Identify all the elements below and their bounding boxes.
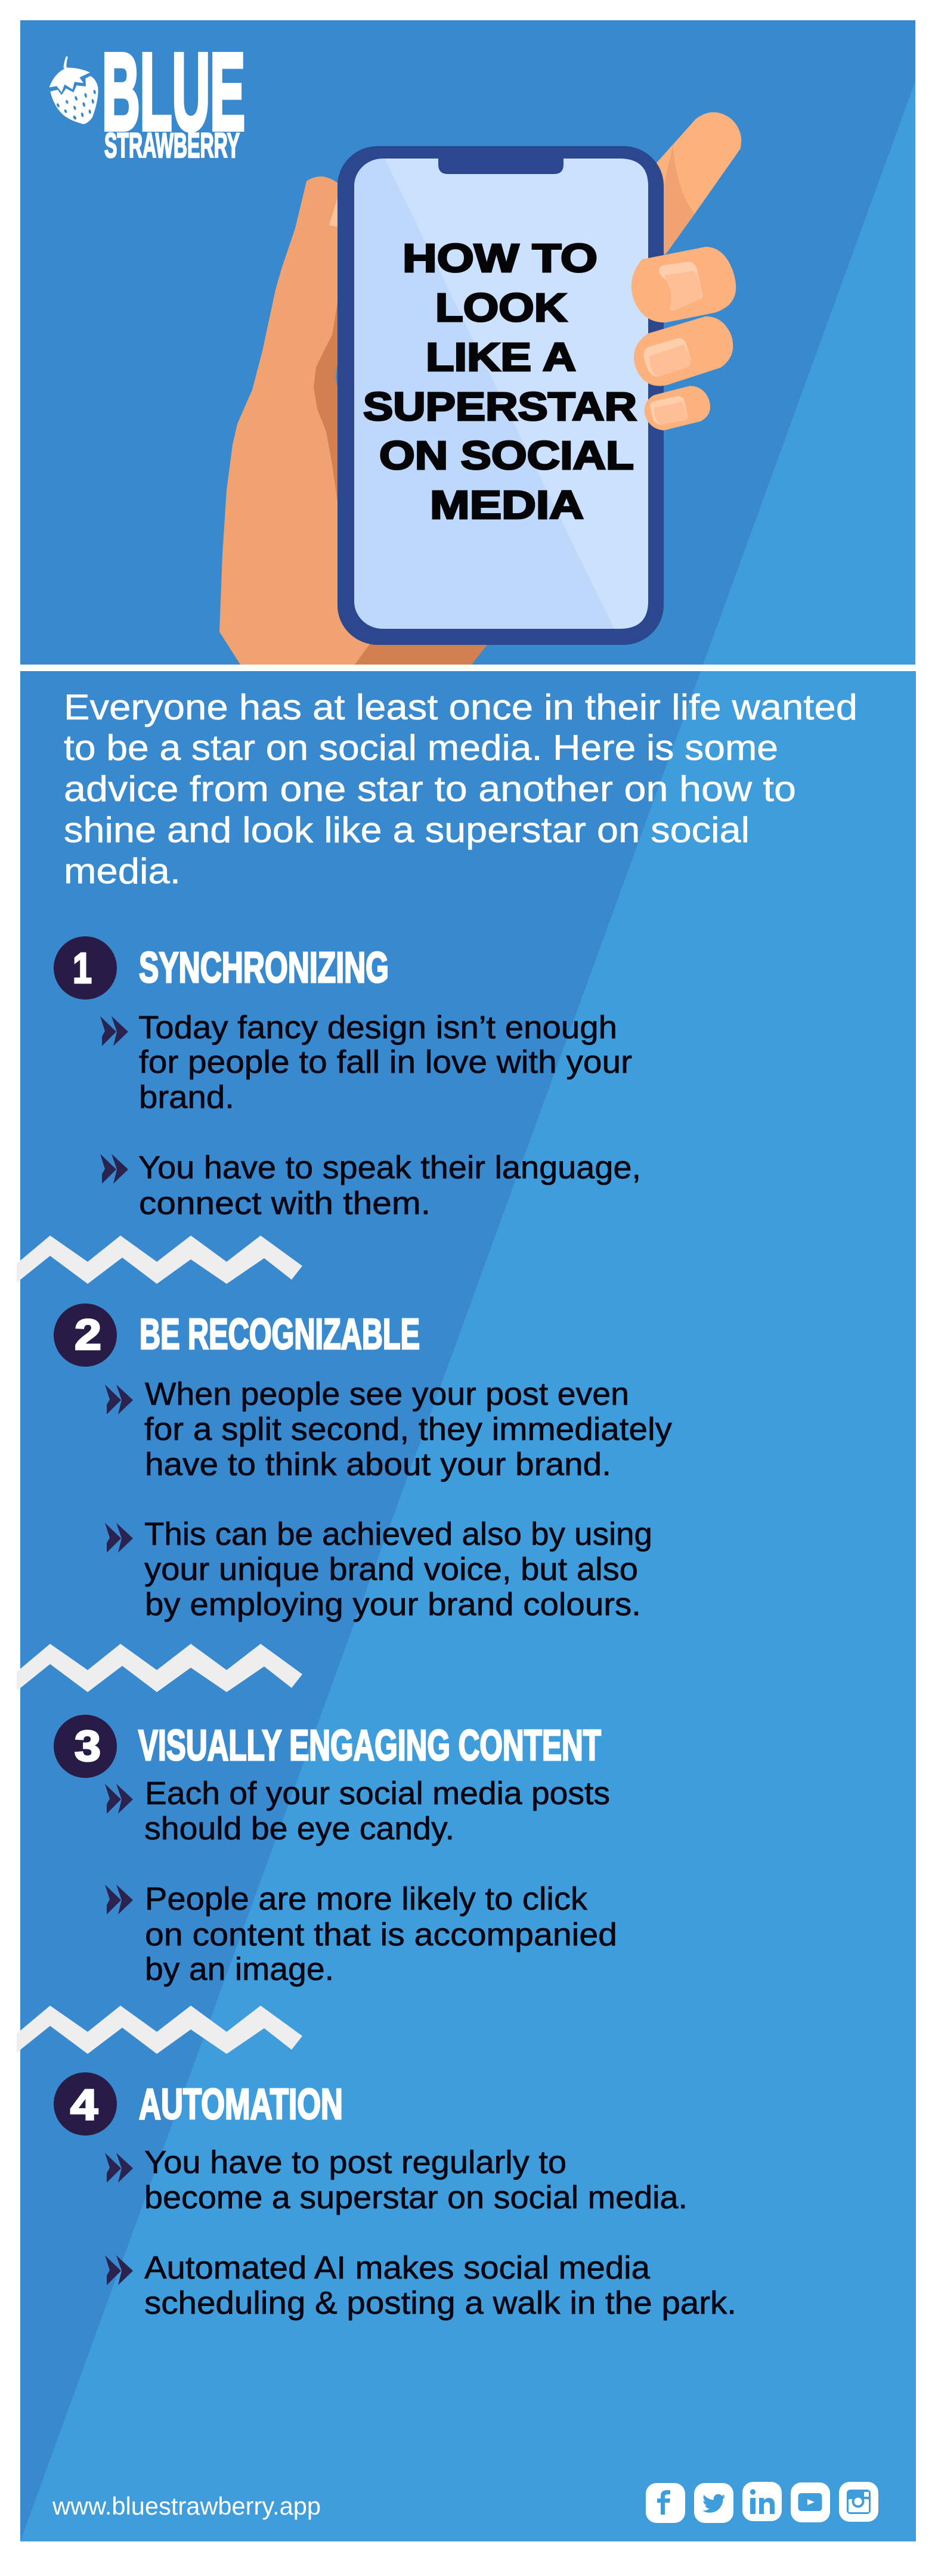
bullet icon xyxy=(105,1523,133,1553)
number badge 1 xyxy=(54,936,117,1000)
phone screen xyxy=(354,159,648,629)
icon: twitter xyxy=(694,2483,733,2523)
bullet text: your unique brand voice, but also xyxy=(144,1551,638,1587)
number badge 2 xyxy=(54,1303,117,1367)
intro paragraph: advice from one star to another on how to xyxy=(64,769,796,809)
number badge 1: 1 xyxy=(73,945,92,992)
bullet text: You have to post regularly to xyxy=(144,2144,566,2180)
bullet text xyxy=(144,2144,688,2215)
bullet icon xyxy=(105,2255,133,2285)
logo wordmark: STRAWBERRY: STRAWBERRY xyxy=(104,126,240,165)
bullet icon xyxy=(100,1016,128,1046)
bullet text: Automated AI makes social media xyxy=(144,2250,651,2286)
number badge 4: 4 xyxy=(70,2081,98,2129)
intro paragraph: Everyone has at least once in their life wanted xyxy=(64,687,857,727)
bullet text xyxy=(138,1010,632,1115)
bullet text: by employing your brand colours. xyxy=(145,1587,641,1622)
thumb finger xyxy=(656,112,741,254)
palm lower shadow xyxy=(355,643,489,665)
bullet text: People are more likely to click xyxy=(145,1881,588,1917)
bullet text: have to think about your brand. xyxy=(145,1447,611,1482)
bullet text: for people to fall in love with your xyxy=(139,1044,632,1080)
heading 4: AUTOMATION xyxy=(139,2081,343,2128)
icon: youtube xyxy=(791,2482,830,2522)
bullet text: scheduling & posting a walk in the park. xyxy=(144,2285,736,2321)
icon: strawberry xyxy=(49,56,98,124)
fingers xyxy=(631,247,736,430)
bullet text: This can be achieved also by using xyxy=(144,1516,652,1552)
bullet text xyxy=(144,1516,652,1622)
bullet text: should be eye candy. xyxy=(144,1811,454,1846)
bullet text: Today fancy design isn’t enough xyxy=(138,1010,617,1045)
panel: hero background xyxy=(20,20,915,665)
intro paragraph: media. xyxy=(64,851,181,891)
bullet text xyxy=(144,2250,736,2321)
section 3: visually engaging content xyxy=(54,1715,617,1987)
illustration: hand holding phone xyxy=(219,112,741,665)
section 2: be recognizable xyxy=(54,1303,672,1622)
finger 3 xyxy=(645,386,710,430)
icon: facebook xyxy=(646,2483,685,2523)
bullet text xyxy=(138,1150,641,1221)
phone body xyxy=(338,146,664,645)
zigzag divider 1 xyxy=(17,1236,302,1284)
bullet text: When people see your post even xyxy=(145,1376,629,1412)
thumb nail edge xyxy=(329,190,340,227)
icon: linkedin xyxy=(742,2482,782,2521)
hand palm xyxy=(219,176,382,665)
intro paragraph xyxy=(64,687,857,891)
title: SUPERSTAR xyxy=(363,384,637,429)
bullet icon xyxy=(105,1385,133,1414)
palm shadow xyxy=(314,298,358,519)
bullet text: brand. xyxy=(139,1079,234,1115)
bullet icon xyxy=(100,1154,128,1184)
title xyxy=(363,236,637,527)
intro paragraph: to be a star on social media. Here is some xyxy=(64,728,778,768)
phone notch xyxy=(438,157,564,174)
number badge 3: 3 xyxy=(75,1722,101,1770)
title: ON SOCIAL xyxy=(379,433,634,478)
screen glare xyxy=(385,159,648,629)
footer url: www.bluestrawberry.app xyxy=(52,2492,321,2520)
heading 2: BE RECOGNIZABLE xyxy=(140,1311,420,1358)
bullet text: for a split second, they immediately xyxy=(144,1411,672,1447)
social icons xyxy=(646,2482,878,2523)
bullet icon xyxy=(105,1885,133,1914)
section 4: automation xyxy=(54,2072,736,2321)
title: MEDIA xyxy=(430,483,584,527)
intro paragraph: shine and look like a superstar on social xyxy=(64,810,750,850)
panel: body background xyxy=(20,671,916,2541)
number badge 3 xyxy=(54,1715,117,1778)
bullet icon xyxy=(105,1784,133,1814)
bullet text xyxy=(144,1376,672,1482)
title: LOOK xyxy=(435,285,567,330)
bullet text xyxy=(145,1881,617,1987)
finger 2 xyxy=(634,316,733,386)
finger 1 xyxy=(631,247,736,322)
title: HOW TO xyxy=(403,236,597,281)
heading 1: SYNCHRONIZING xyxy=(139,944,389,992)
text: BLUE xyxy=(102,30,245,153)
bullet text: connect with them. xyxy=(139,1185,431,1221)
zigzag divider 3 xyxy=(17,2006,302,2054)
bullet text: on content that is accompanied xyxy=(145,1917,617,1953)
zigzag divider 2 xyxy=(17,1644,302,1692)
logo: Blue Strawberry xyxy=(49,30,245,165)
bullet text: by an image. xyxy=(145,1951,334,1987)
bullet text xyxy=(144,1776,610,1846)
bullet icon xyxy=(105,2153,133,2183)
icon: instagram xyxy=(839,2482,878,2522)
number badge 4 xyxy=(54,2072,117,2136)
bullet text: You have to speak their language, xyxy=(138,1150,641,1185)
bullet text: Each of your social media posts xyxy=(145,1776,610,1811)
bullet text: become a superstar on social media. xyxy=(144,2180,688,2215)
gap behind phone xyxy=(336,358,341,388)
number badge 2: 2 xyxy=(75,1311,101,1359)
title: LIKE A xyxy=(426,335,576,380)
section 1: synchronizing xyxy=(54,936,641,1221)
heading 3: VISUALLY ENGAGING CONTENT xyxy=(138,1722,601,1770)
